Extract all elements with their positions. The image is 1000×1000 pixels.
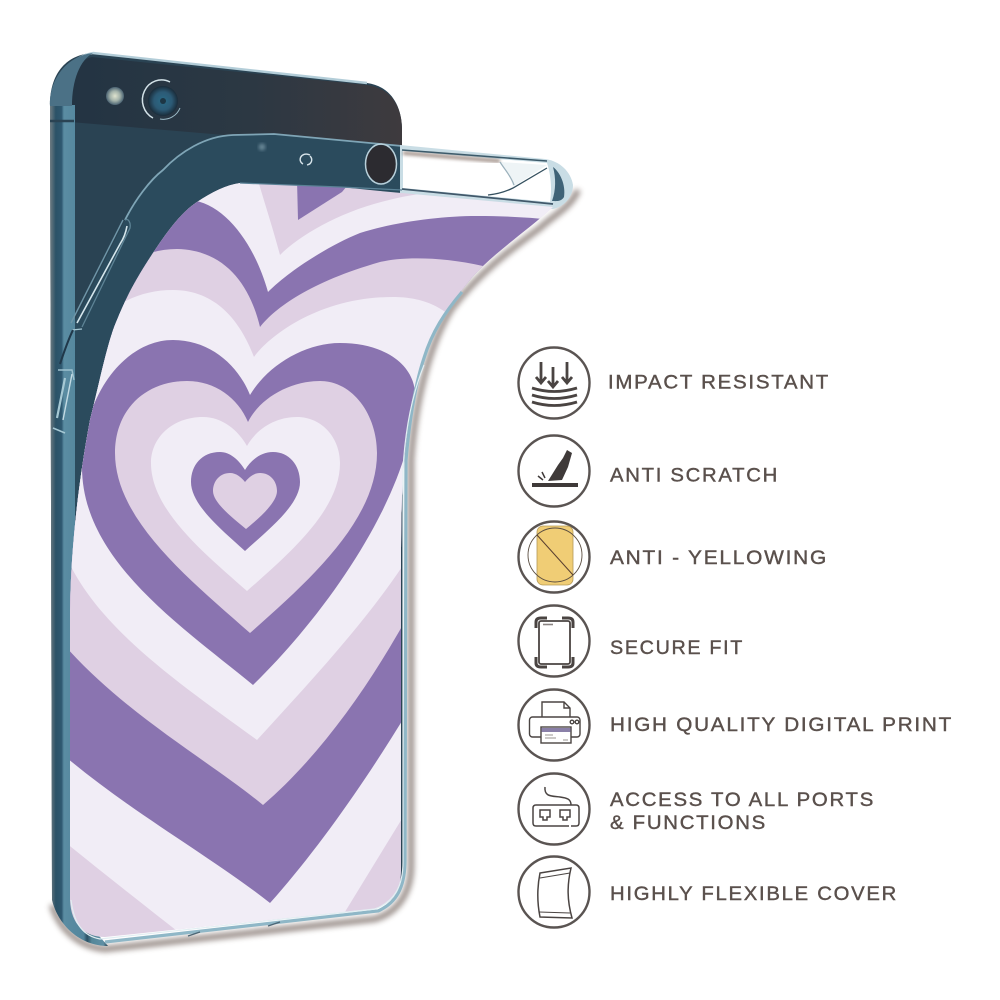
label: ANTI SCRATCH: [610, 466, 779, 486]
camera lens: [142, 80, 180, 119]
printed heart pattern: [70, 183, 553, 937]
heart ring 2: [191, 452, 300, 551]
heart ring 4: [115, 381, 377, 633]
icon: scratch blade: [518, 436, 590, 506]
flash: [106, 87, 124, 105]
label: HIGHLY FLEXIBLE COVER: [610, 884, 898, 905]
icon: ports: [518, 774, 590, 844]
heart ring 3: [151, 417, 340, 591]
feature: highly flexible cover: [518, 856, 898, 928]
top edge highlight: [56, 53, 367, 92]
feature: anti scratch: [518, 436, 779, 506]
left frame: [50, 105, 108, 946]
label: ACCESS TO ALL PORTS: [610, 790, 875, 811]
feature: anti yellowing: [518, 522, 828, 592]
heart ring 9: [70, 183, 553, 930]
label: ANTI - YELLOWING: [610, 548, 828, 569]
frame seam: [50, 120, 74, 122]
icon: yellowed case crossed out: [518, 522, 590, 592]
drop shadow: [52, 190, 578, 949]
icon: bent cover: [518, 856, 590, 928]
base band: [60, 170, 560, 950]
case right corner: [400, 145, 573, 209]
icon: printer: [518, 690, 590, 760]
fingerprint cut-out: [366, 144, 396, 184]
label: SECURE FIT: [610, 638, 744, 659]
phone back top band: [70, 57, 402, 150]
label: HIGH QUALITY DIGITAL PRINT: [610, 715, 953, 736]
label: IMPACT RESISTANT: [608, 372, 830, 394]
heart ring 6: [72, 290, 445, 740]
heart centre: [213, 473, 277, 529]
icon: phone with bumpers: [518, 606, 590, 676]
case rim inner highlight: [71, 365, 424, 939]
case dot: [258, 144, 266, 150]
phone back: [50, 53, 404, 930]
case rim: [125, 134, 402, 220]
heart ring 5: [82, 340, 415, 685]
top chevron tip: [297, 186, 346, 220]
heart ring 8: [70, 202, 540, 903]
case tinted back: [70, 134, 403, 600]
side button moulding: [71, 219, 130, 330]
feature: high quality digital print: [518, 690, 953, 760]
icon: impact: [518, 348, 590, 418]
bottom ports marks: [188, 922, 280, 936]
feature: secure fit: [518, 606, 744, 676]
case outer right rim: [105, 292, 462, 942]
top print edge line: [240, 183, 402, 190]
case port hole: [300, 154, 312, 165]
heart ring 7: [70, 249, 483, 805]
label: second line: & FUNCTIONS: [610, 813, 767, 834]
left frame corner: [50, 53, 93, 106]
feature: impact resistant: [518, 348, 830, 418]
feature: access to all ports and functions: [518, 774, 875, 844]
left clasp: [53, 330, 74, 433]
phone with transparent case: [46, 52, 584, 956]
